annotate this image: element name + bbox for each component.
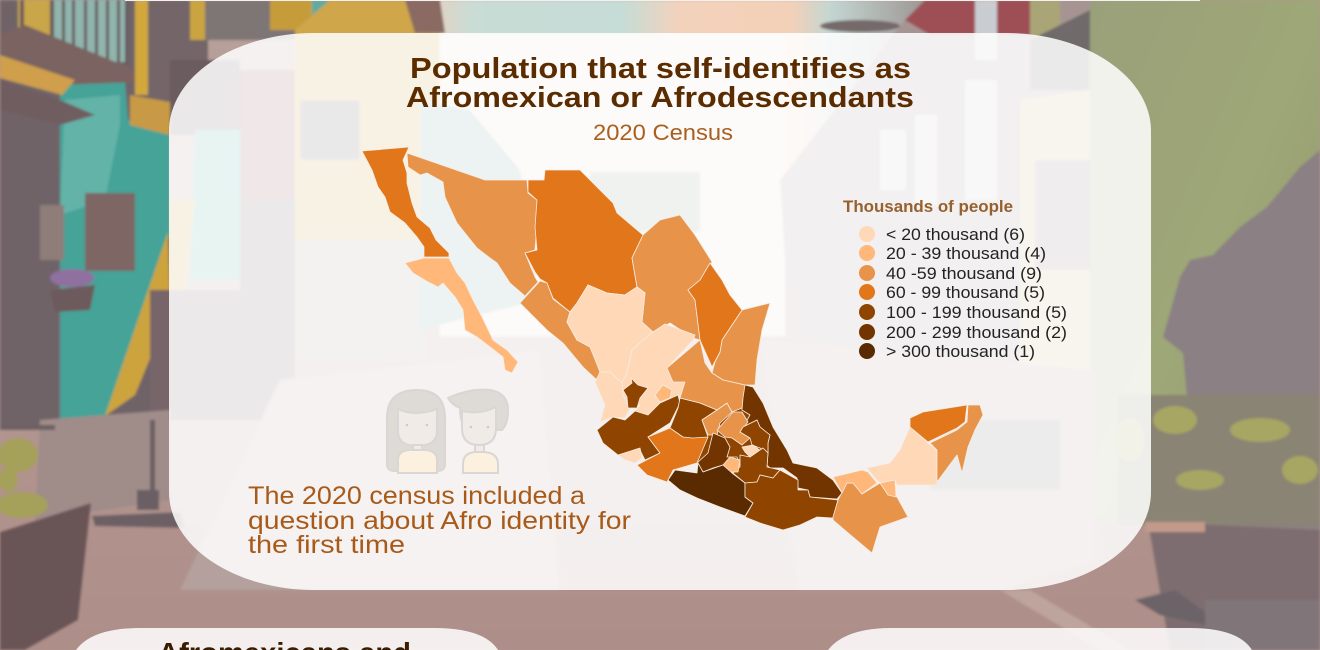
icon: woman [387,390,445,473]
Tlaxcala area [740,420,770,453]
Hidalgo [717,412,750,445]
Jalisco north [623,378,648,408]
title: Afromexican or Afrodescendants [406,82,914,114]
Tamaulipas [712,295,770,385]
legend labels: 100 - 199 thousand (5) [886,303,1067,322]
legend labels: 200 - 299 thousand (2) [886,323,1067,342]
Zacatecas [622,324,695,416]
Chihuahua [525,170,643,312]
Oaxaca [745,470,838,530]
census note: question about Afro identity for [248,507,631,535]
lower left panel [76,628,498,650]
icon: woman and man [387,390,508,473]
legend [843,197,1067,361]
legend labels: 60 - 99 thousand (5) [886,283,1045,302]
legend labels: > 300 thousand (1) [886,342,1035,361]
Quintana Roo [930,405,983,482]
Colima [618,448,642,463]
Jalisco [597,395,680,460]
Campeche [867,427,937,485]
top panel sliver [125,0,1200,1]
legend title: Thousands of people [843,197,1013,216]
State of Mexico [697,433,740,472]
Baja California Sur [405,258,518,373]
Puebla [733,448,780,483]
legend labels: 20 - 39 thousand (4) [886,244,1046,263]
Queretaro [702,403,732,435]
Nayarit [595,372,630,422]
Tabasco [833,470,877,494]
Guanajuato [670,398,717,438]
Veracruz [742,385,842,499]
legend labels: 40 -59 thousand (9) [886,264,1042,283]
Chiapas [833,483,908,553]
Mexico City [742,445,762,457]
Baja California [362,147,449,257]
title [406,53,914,114]
title: Population that self-identifies as [410,53,911,85]
main panel [169,33,1151,590]
icon: man [448,390,508,473]
lower right panel [828,628,1252,650]
Nuevo Leon [688,263,742,367]
choropleth map of Mexico [362,147,983,553]
Sonora [407,153,538,296]
San Luis Potosi [667,340,745,412]
Michoacan [637,428,708,482]
legend labels [886,225,1067,361]
census note: The 2020 census included a [248,482,585,510]
Tabasco east [880,480,896,497]
Morelos [723,457,740,472]
census note: the first time [248,531,405,559]
legend swatches [859,226,875,359]
central backing [690,405,772,472]
census note [248,482,631,559]
Guerrero [668,463,753,516]
Durango [567,285,653,383]
subtitle: 2020 Census [593,120,733,145]
Coahuila [632,215,712,340]
Aguascalientes [655,385,672,402]
Sinaloa [520,281,600,381]
legend labels: < 20 thousand (6) [886,225,1025,244]
Yucatan [910,405,967,442]
